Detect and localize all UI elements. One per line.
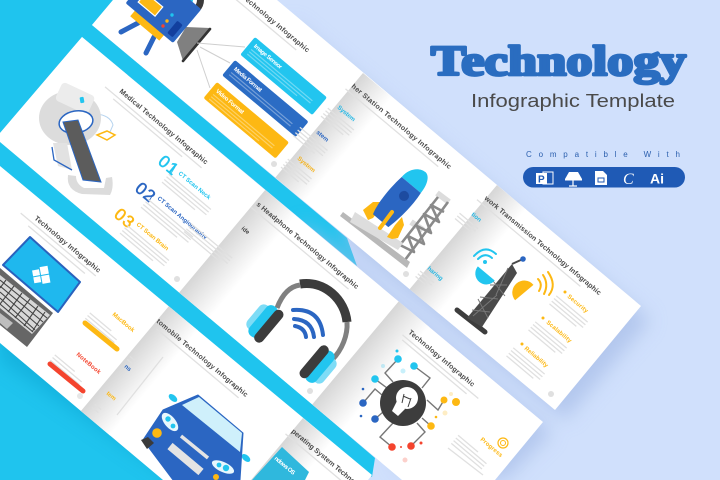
callout: Video Format: Video Format (214, 89, 245, 116)
fog lights (152, 428, 162, 438)
icon: Illustrator: Ai (650, 170, 664, 186)
patient table (63, 120, 101, 182)
headphone slide title: s Headphone Technology Infographic (255, 201, 360, 291)
transmission tower illustration (457, 249, 553, 332)
page marker (174, 276, 180, 282)
callout: Media Format: Media Format (232, 67, 263, 94)
right headlight (210, 457, 236, 477)
yellow control panel (97, 131, 115, 140)
label: sharing: haring (426, 266, 444, 283)
headphones illustration (241, 283, 347, 390)
icon: PowerPoint: P (538, 174, 545, 186)
list: Security: Security (566, 294, 589, 315)
page marker (77, 393, 83, 399)
page marker (271, 161, 277, 167)
list: Reliability: Reliability (523, 346, 549, 370)
car body (143, 395, 243, 480)
headphone slide left label: ide (240, 226, 251, 237)
scanner ring (39, 91, 101, 145)
label: System blue: stem (315, 130, 329, 144)
label: tion: tion (470, 212, 482, 224)
laptop base (0, 268, 53, 347)
MacBook item (83, 312, 136, 349)
Progress item: Progress (479, 437, 504, 459)
scanner base (53, 143, 72, 170)
tower mast (467, 264, 517, 327)
cyan background shapes (0, 0, 375, 480)
tripod legs (121, 23, 154, 53)
shading: bulb slide edge (310, 301, 430, 432)
callout: Image Sensor: Image Sensor (252, 44, 283, 71)
network slide title: work Transmission Technology Infographic (482, 195, 602, 297)
headphone slide left label (184, 199, 253, 266)
callout: Image Sensor (240, 37, 327, 115)
scanner outline accents (96, 114, 113, 132)
heading: Technology: Technology (431, 39, 686, 85)
mirrors (167, 392, 179, 404)
number 03 item: CT Scan Brain (135, 222, 169, 252)
page marker (307, 388, 313, 394)
headband (277, 283, 347, 360)
Windows OS panel (252, 447, 309, 480)
yellow signal arcs (538, 272, 553, 295)
bulb slide title: Technology Infographic (407, 329, 476, 389)
cyan wifi arcs (474, 249, 496, 259)
medical slide title: Medical Technology Infographic (118, 88, 209, 166)
cyan nodes (371, 350, 418, 383)
label: blue: ns (123, 364, 132, 373)
red nodes (388, 442, 422, 462)
rocket slide title: her Station Technology Infographic (350, 83, 452, 171)
cyan dish (471, 266, 495, 289)
right ear cup (297, 343, 342, 390)
NoteBook item: NoteBook (75, 352, 102, 376)
left headlight (159, 410, 181, 434)
shading: network slide edge (408, 185, 526, 315)
label: System yellow: System (296, 156, 316, 174)
rocket slide labels (281, 100, 360, 187)
windshield (182, 397, 242, 452)
icon: Keynote (565, 172, 582, 186)
circuit traces (363, 359, 444, 447)
callout: Video Format (204, 82, 289, 159)
callout: Media Format (222, 60, 309, 137)
Windows OS panel: ndows OS (273, 456, 296, 477)
compatibility pill (523, 167, 685, 188)
reel (172, 0, 204, 16)
slide: medical headphone bulb row (0, 37, 543, 480)
windows logo (32, 266, 50, 285)
label: orange: tem (105, 391, 117, 402)
connector lines (197, 43, 245, 88)
number 03 item (110, 205, 175, 268)
icon: PowerPoint (536, 172, 553, 186)
MacBook item: MacBook (111, 312, 136, 334)
rocket fins (363, 202, 385, 220)
slide: camera and rocket and network row (92, 0, 641, 410)
number 01 item: CT Scan Neck (177, 171, 212, 202)
subheading: Infographic Template: Infographic Template (471, 90, 675, 111)
NoteBook item (48, 352, 102, 391)
scanner bore (57, 108, 95, 136)
rocket body (370, 162, 434, 230)
laptop illustration (0, 237, 80, 347)
lens (177, 27, 210, 61)
laptop screen (3, 237, 80, 312)
launch platform (340, 212, 410, 268)
bulb disc (380, 380, 426, 426)
network slide left labels (416, 206, 484, 291)
laptop slide title: Technology Infographic (33, 215, 102, 275)
bulb slide title (400, 327, 485, 402)
orange nodes (427, 392, 460, 430)
number 01 item: 01 (154, 152, 182, 179)
number 02 item: CT Scan Angiography (156, 196, 208, 241)
number 02 item (131, 179, 208, 253)
page marker (548, 391, 554, 397)
yellow dish (507, 276, 533, 300)
Progress item (448, 435, 508, 475)
camera body (121, 0, 201, 48)
rocket illustration (340, 162, 449, 268)
automobile slide left labels (92, 356, 163, 415)
slide: laptop automobile operating row (0, 166, 372, 480)
shading: automobile slide edge (80, 306, 198, 436)
laptop slide title (17, 206, 102, 280)
laptop keyboard (0, 275, 50, 334)
bumper tip (141, 437, 154, 449)
number 03 item: 03 (110, 205, 138, 232)
shading: rocket slide edge (274, 73, 392, 203)
camera illustration (121, 0, 245, 88)
bulb glyph (392, 387, 418, 416)
list: Reliability (506, 340, 551, 382)
car illustration (141, 392, 252, 480)
number 02 item: 02 (131, 179, 159, 206)
list: Security (549, 288, 594, 330)
camera indicator lights (161, 13, 174, 28)
page marker (403, 271, 409, 277)
wifi symbol (293, 310, 323, 337)
list: Scalability: Scalability (545, 320, 573, 345)
automobile slide title: tomobile Technology Infographic (155, 318, 249, 399)
icon: Canva: C (623, 171, 634, 188)
icon: Google Slides (595, 171, 607, 185)
shading: headphone slide edge (177, 189, 297, 320)
label: System cyan: System (336, 105, 356, 123)
list: Scalability (528, 314, 573, 356)
number 01 item (154, 152, 217, 217)
tower base (457, 310, 485, 332)
MRI scanner illustration (39, 82, 115, 195)
launch tower (400, 193, 449, 260)
grilles (181, 436, 208, 458)
circuit bulb illustration (359, 350, 460, 462)
rocket flame (380, 212, 392, 228)
shading: operating slide edge (251, 418, 326, 480)
blue nodes (359, 388, 379, 423)
label: Compatible With: Compatible With (526, 150, 680, 159)
left ear cup (241, 298, 286, 345)
